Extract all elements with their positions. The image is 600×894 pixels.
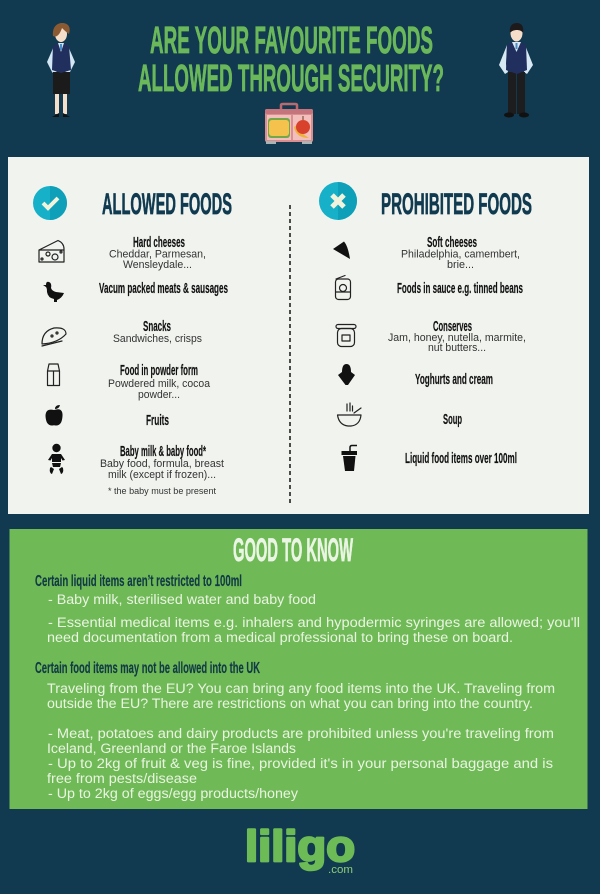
- text block: food items into the UK: outside the EU? There are restrictions on what you can bring into the country.: [47, 696, 533, 712]
- text block: food items into the UK: [35, 660, 555, 802]
- icon: tin can: [336, 276, 350, 300]
- item: soft cheeses: [401, 235, 520, 271]
- icon: apple: [46, 405, 63, 426]
- item: baby milk: * the baby must be present: [108, 486, 216, 496]
- panel: foods list: [8, 157, 589, 514]
- item: conserves: nut butters...: [428, 342, 486, 354]
- item: fruits: Fruits: [146, 413, 169, 429]
- text block: liquid items: - Baby milk, sterilised water and baby food: [48, 592, 316, 608]
- icon: ice cream: [338, 364, 355, 385]
- item: powder food: Powdered milk, cocoa: [108, 378, 210, 390]
- item: soup: Soup: [443, 412, 462, 428]
- item: hard cheeses: Hard cheeses: [133, 235, 185, 251]
- icon: female security officer: [47, 23, 75, 117]
- icon: hard cheese: [39, 240, 64, 262]
- logo: liligo.com: liligo: [245, 822, 355, 871]
- text block: food items into the UK: Certain food items may not be allowed into the UK: [35, 660, 260, 677]
- panel: prohibited foods: [319, 182, 532, 471]
- icon: soup bowl: [338, 403, 361, 426]
- icon: male security officer: [499, 23, 533, 118]
- text block: liquid items: need documentation from a medical professional to bring these on board.: [47, 630, 513, 646]
- item: powder food: [108, 363, 210, 401]
- item: snacks: Snacks: [143, 319, 171, 335]
- panel: good to know: [10, 529, 588, 809]
- text block: food items into the UK: Traveling from the EU? You can bring any food items into the UK. Traveling from: [47, 681, 555, 697]
- item: hard cheeses: Cheddar, Parmesan,: [109, 248, 206, 260]
- item: baby milk: milk (except if frozen)...: [108, 469, 216, 481]
- text block: food items into the UK: - Meat, potatoes and dairy products are prohibited unless you're traveling from: [48, 726, 554, 742]
- item: conserves: Jam, honey, nutella, marmite,: [388, 332, 526, 344]
- item: conserves: [388, 319, 526, 354]
- title: [138, 20, 444, 100]
- icon: milk carton: [48, 364, 60, 386]
- item: conserves: Conserves: [433, 319, 472, 335]
- text block: food items into the UK: free from pests/disease: [47, 771, 197, 787]
- item: soft cheeses: brie...: [447, 259, 474, 271]
- item: soft cheeses: Philadelphia, camembert,: [401, 248, 520, 260]
- text: ALLOWED FOODS: [102, 188, 232, 221]
- panel: allowed foods: [33, 186, 232, 496]
- text block: food items into the UK: - Up to 2kg of eggs/egg products/honey: [48, 786, 299, 802]
- divider: [289, 205, 291, 503]
- item: hard cheeses: Wensleydale...: [123, 259, 192, 271]
- item: baby milk: Baby food, formula, breast: [100, 458, 224, 470]
- text block: food items into the UK: - Up to 2kg of fruit & veg is fine, provided it's in your personal baggage and is: [48, 756, 553, 772]
- icon: drink cup: [342, 446, 357, 471]
- text block: liquid items: Certain liquid items aren’t restricted to 100ml: [35, 573, 242, 590]
- item: yoghurts: Yoghurts and cream: [415, 372, 493, 388]
- item: vacuum packed meats: Vacum packed meats & sausages: [99, 281, 228, 297]
- item: powder food: Food in powder form: [120, 363, 198, 379]
- text block: liquid items: - Essential medical items e.g. inhalers and hypodermic syringes are allowed; you'll: [48, 615, 580, 631]
- icon: cross badge: [319, 182, 357, 220]
- text block: liquid items: [35, 573, 580, 646]
- icon: soft cheese: [333, 242, 350, 259]
- item: liquid food: Liquid food items over 100ml: [405, 451, 517, 467]
- item: soft cheeses: Soft cheeses: [427, 235, 477, 251]
- text block: food items into the UK: Iceland, Greenland or the Faroe Islands: [47, 741, 296, 757]
- panel: good to know: GOOD TO KNOW: [233, 532, 353, 568]
- icon: goose: [43, 282, 64, 302]
- icon: taco: [42, 328, 66, 346]
- icon: jam jar: [336, 324, 356, 346]
- item: baby milk: [100, 444, 224, 496]
- item: hard cheeses: [109, 235, 206, 271]
- icon: check badge: [33, 186, 67, 220]
- item: snacks: [113, 319, 202, 345]
- icon: baby: [48, 444, 65, 474]
- icon: lunchbox: [265, 104, 313, 144]
- item: powder food: powder...: [138, 389, 180, 401]
- logo: liligo.com: .com: [328, 864, 353, 876]
- item: baby milk: Baby milk & baby food*: [120, 444, 206, 460]
- item: snacks: Sandwiches, crisps: [113, 333, 202, 345]
